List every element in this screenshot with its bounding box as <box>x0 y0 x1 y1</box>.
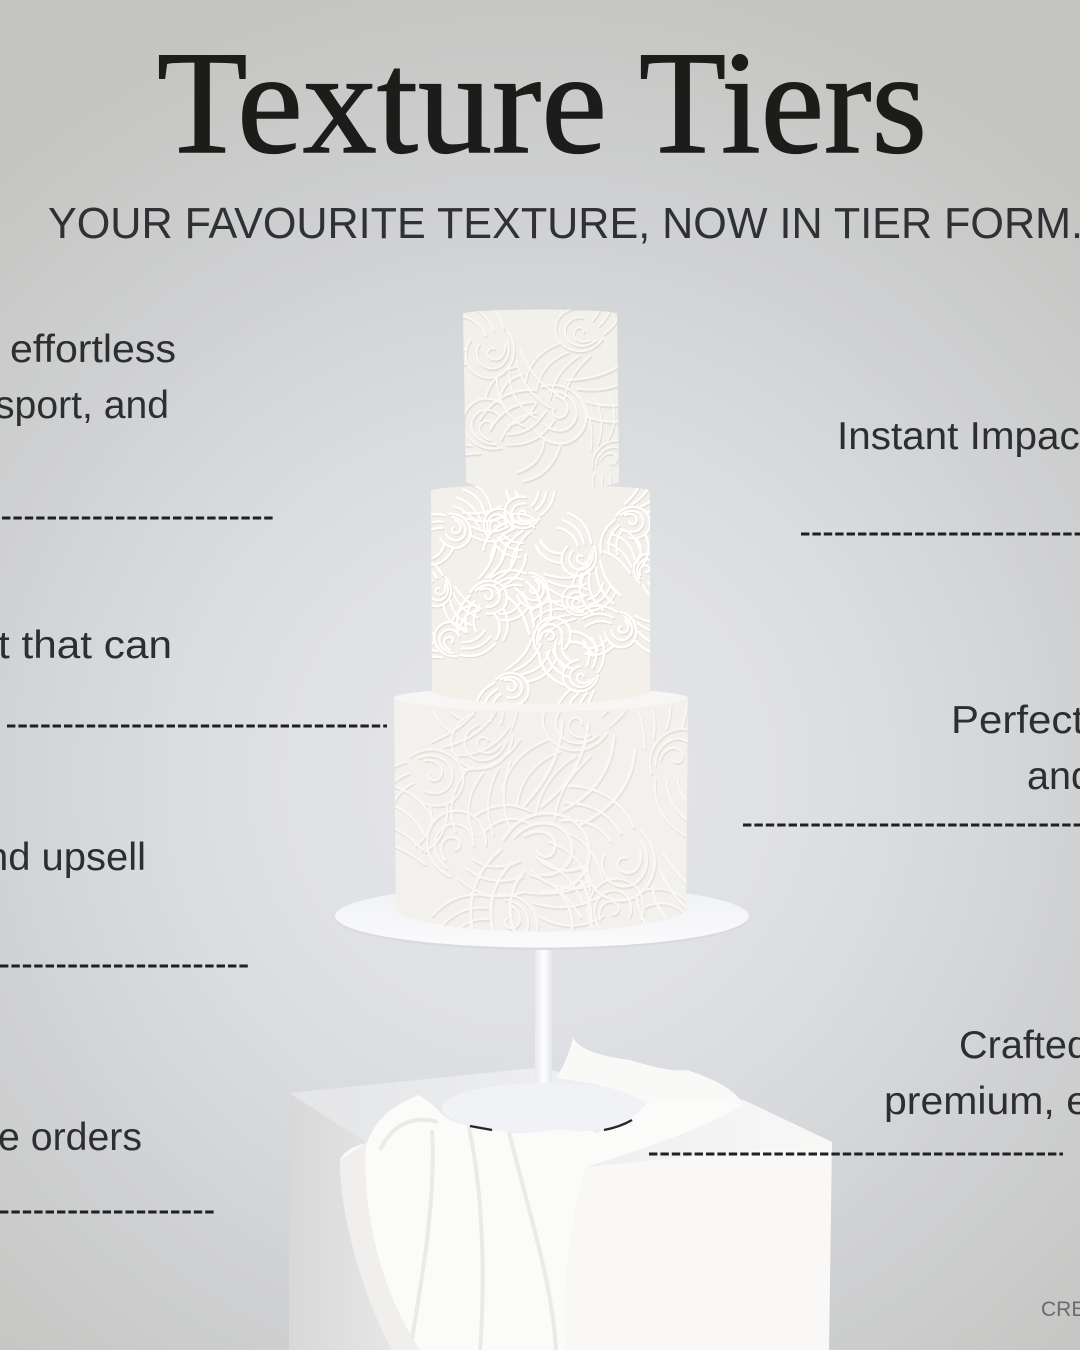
middle tier <box>431 486 650 704</box>
left callout 2: t that can <box>0 624 172 667</box>
cake <box>394 310 688 932</box>
title <box>157 21 927 184</box>
left callout 1 <box>0 328 275 518</box>
plinth left face <box>289 1093 430 1350</box>
subtitle: YOUR FAVOURITE TEXTURE, NOW IN TIER FORM. <box>48 199 1080 248</box>
top tier <box>463 310 619 491</box>
fabric front drape <box>340 1095 744 1350</box>
cake stand plinth <box>289 1068 832 1350</box>
stand base disc <box>442 1083 648 1133</box>
draped fabric <box>340 1038 744 1350</box>
left callout 4: e orders <box>0 1116 142 1159</box>
left callout 1: sport, and <box>0 384 169 427</box>
fabric sheer left edge <box>340 1143 420 1350</box>
title: Texture <box>157 21 607 184</box>
right callout 2 <box>743 699 1080 825</box>
right callout 2: Perfect <box>951 699 1080 742</box>
disc shadow edges <box>470 1120 632 1130</box>
right callout 3 <box>649 1024 1080 1154</box>
stand pole <box>535 945 552 1105</box>
title: Tiers <box>639 21 927 184</box>
fabric back folds <box>556 1038 744 1105</box>
bottom tier <box>394 690 688 932</box>
stand plate <box>335 884 749 950</box>
plinth right face <box>430 1142 832 1350</box>
fabric fold shadows <box>380 1120 556 1350</box>
right callout 1: Instant Impact <box>837 415 1080 458</box>
right callout 3: premium, e <box>884 1080 1080 1123</box>
left callout 1: effortless <box>10 328 176 371</box>
plinth top face <box>289 1068 832 1183</box>
